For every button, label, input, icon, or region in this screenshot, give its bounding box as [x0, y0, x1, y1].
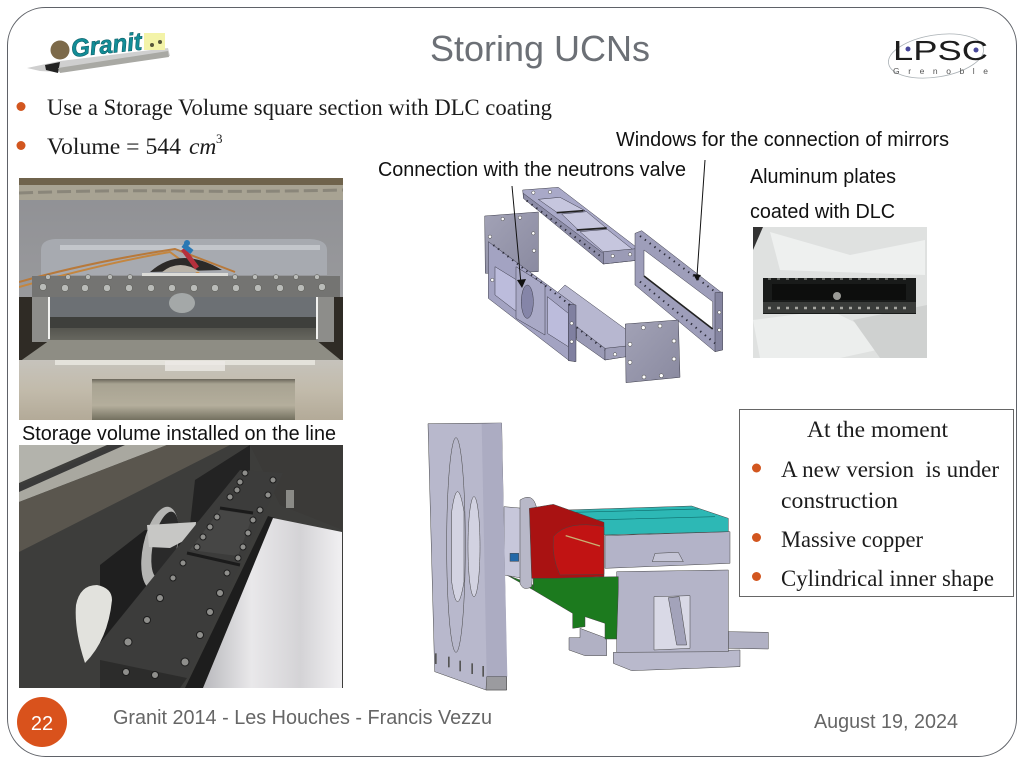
logo: LPSC Grenoble — [885, 28, 988, 84]
CAD drawing: new copper version — [428, 423, 768, 690]
arrow: neutrons valve — [512, 186, 526, 288]
callout bullets: construction — [781, 488, 898, 514]
label: aluminum plates: Aluminum plates — [750, 166, 896, 188]
photo: storage volume — [19, 178, 343, 420]
bullet list: 3 — [216, 131, 222, 146]
label: neutrons valve: Connection with the neutrons valve — [378, 159, 686, 181]
callout bullets — [752, 457, 999, 592]
bolt hole rows — [493, 201, 715, 350]
top tray — [523, 187, 640, 264]
bullet list — [16, 95, 552, 160]
bullet list: Volume = 544 — [47, 134, 181, 160]
label: aluminum plates: coated with DLC — [750, 201, 895, 223]
CAD drawing: exploded storage volume — [485, 187, 723, 383]
red housing — [529, 504, 604, 578]
end plate — [625, 320, 680, 383]
title: Storing UCNs — [430, 28, 650, 69]
label: aluminum plates — [750, 166, 896, 223]
green bracket — [533, 577, 618, 639]
logo: Granit: Granit — [70, 28, 145, 63]
collar — [520, 497, 537, 589]
front flange — [488, 242, 575, 362]
right frame — [635, 231, 722, 352]
callout bullets: Massive copper — [781, 527, 923, 553]
label: windows for mirrors: Windows for the connection of mirrors — [616, 129, 949, 151]
cylinder — [504, 507, 523, 578]
gray pedestal — [617, 570, 728, 652]
caption: storage volume: Storage volume installed on the line — [22, 423, 336, 445]
wall plate — [428, 423, 507, 690]
logo: Granit — [27, 28, 170, 73]
logo: LPSC Grenoble: LPSC — [893, 35, 988, 66]
page number badge: 22 — [31, 713, 53, 735]
back plate — [485, 212, 538, 273]
gray body — [605, 532, 730, 568]
teal lid — [567, 506, 728, 535]
logo: LPSC Grenoble: Grenoble — [893, 66, 988, 76]
photo: installed on line — [19, 445, 343, 688]
bullet list: cm — [189, 134, 216, 160]
photo: coated plates — [753, 227, 927, 358]
footer date: August 19, 2024 — [814, 711, 958, 733]
front long section — [540, 285, 627, 360]
callout bullets: Cylindrical inner shape — [781, 566, 994, 592]
callout: at the moment — [740, 410, 1014, 596]
footer text: Granit 2014 - Les Houches - Francis Vezzu — [113, 707, 492, 729]
callout heading: At the moment — [807, 417, 948, 443]
callout bullets: A new version is under — [781, 457, 999, 483]
bullet list: Use a Storage Volume square section with DLC coating — [47, 95, 552, 121]
arrow: windows for mirrors — [693, 160, 705, 281]
page number badge — [17, 697, 67, 747]
base feet — [728, 632, 768, 649]
